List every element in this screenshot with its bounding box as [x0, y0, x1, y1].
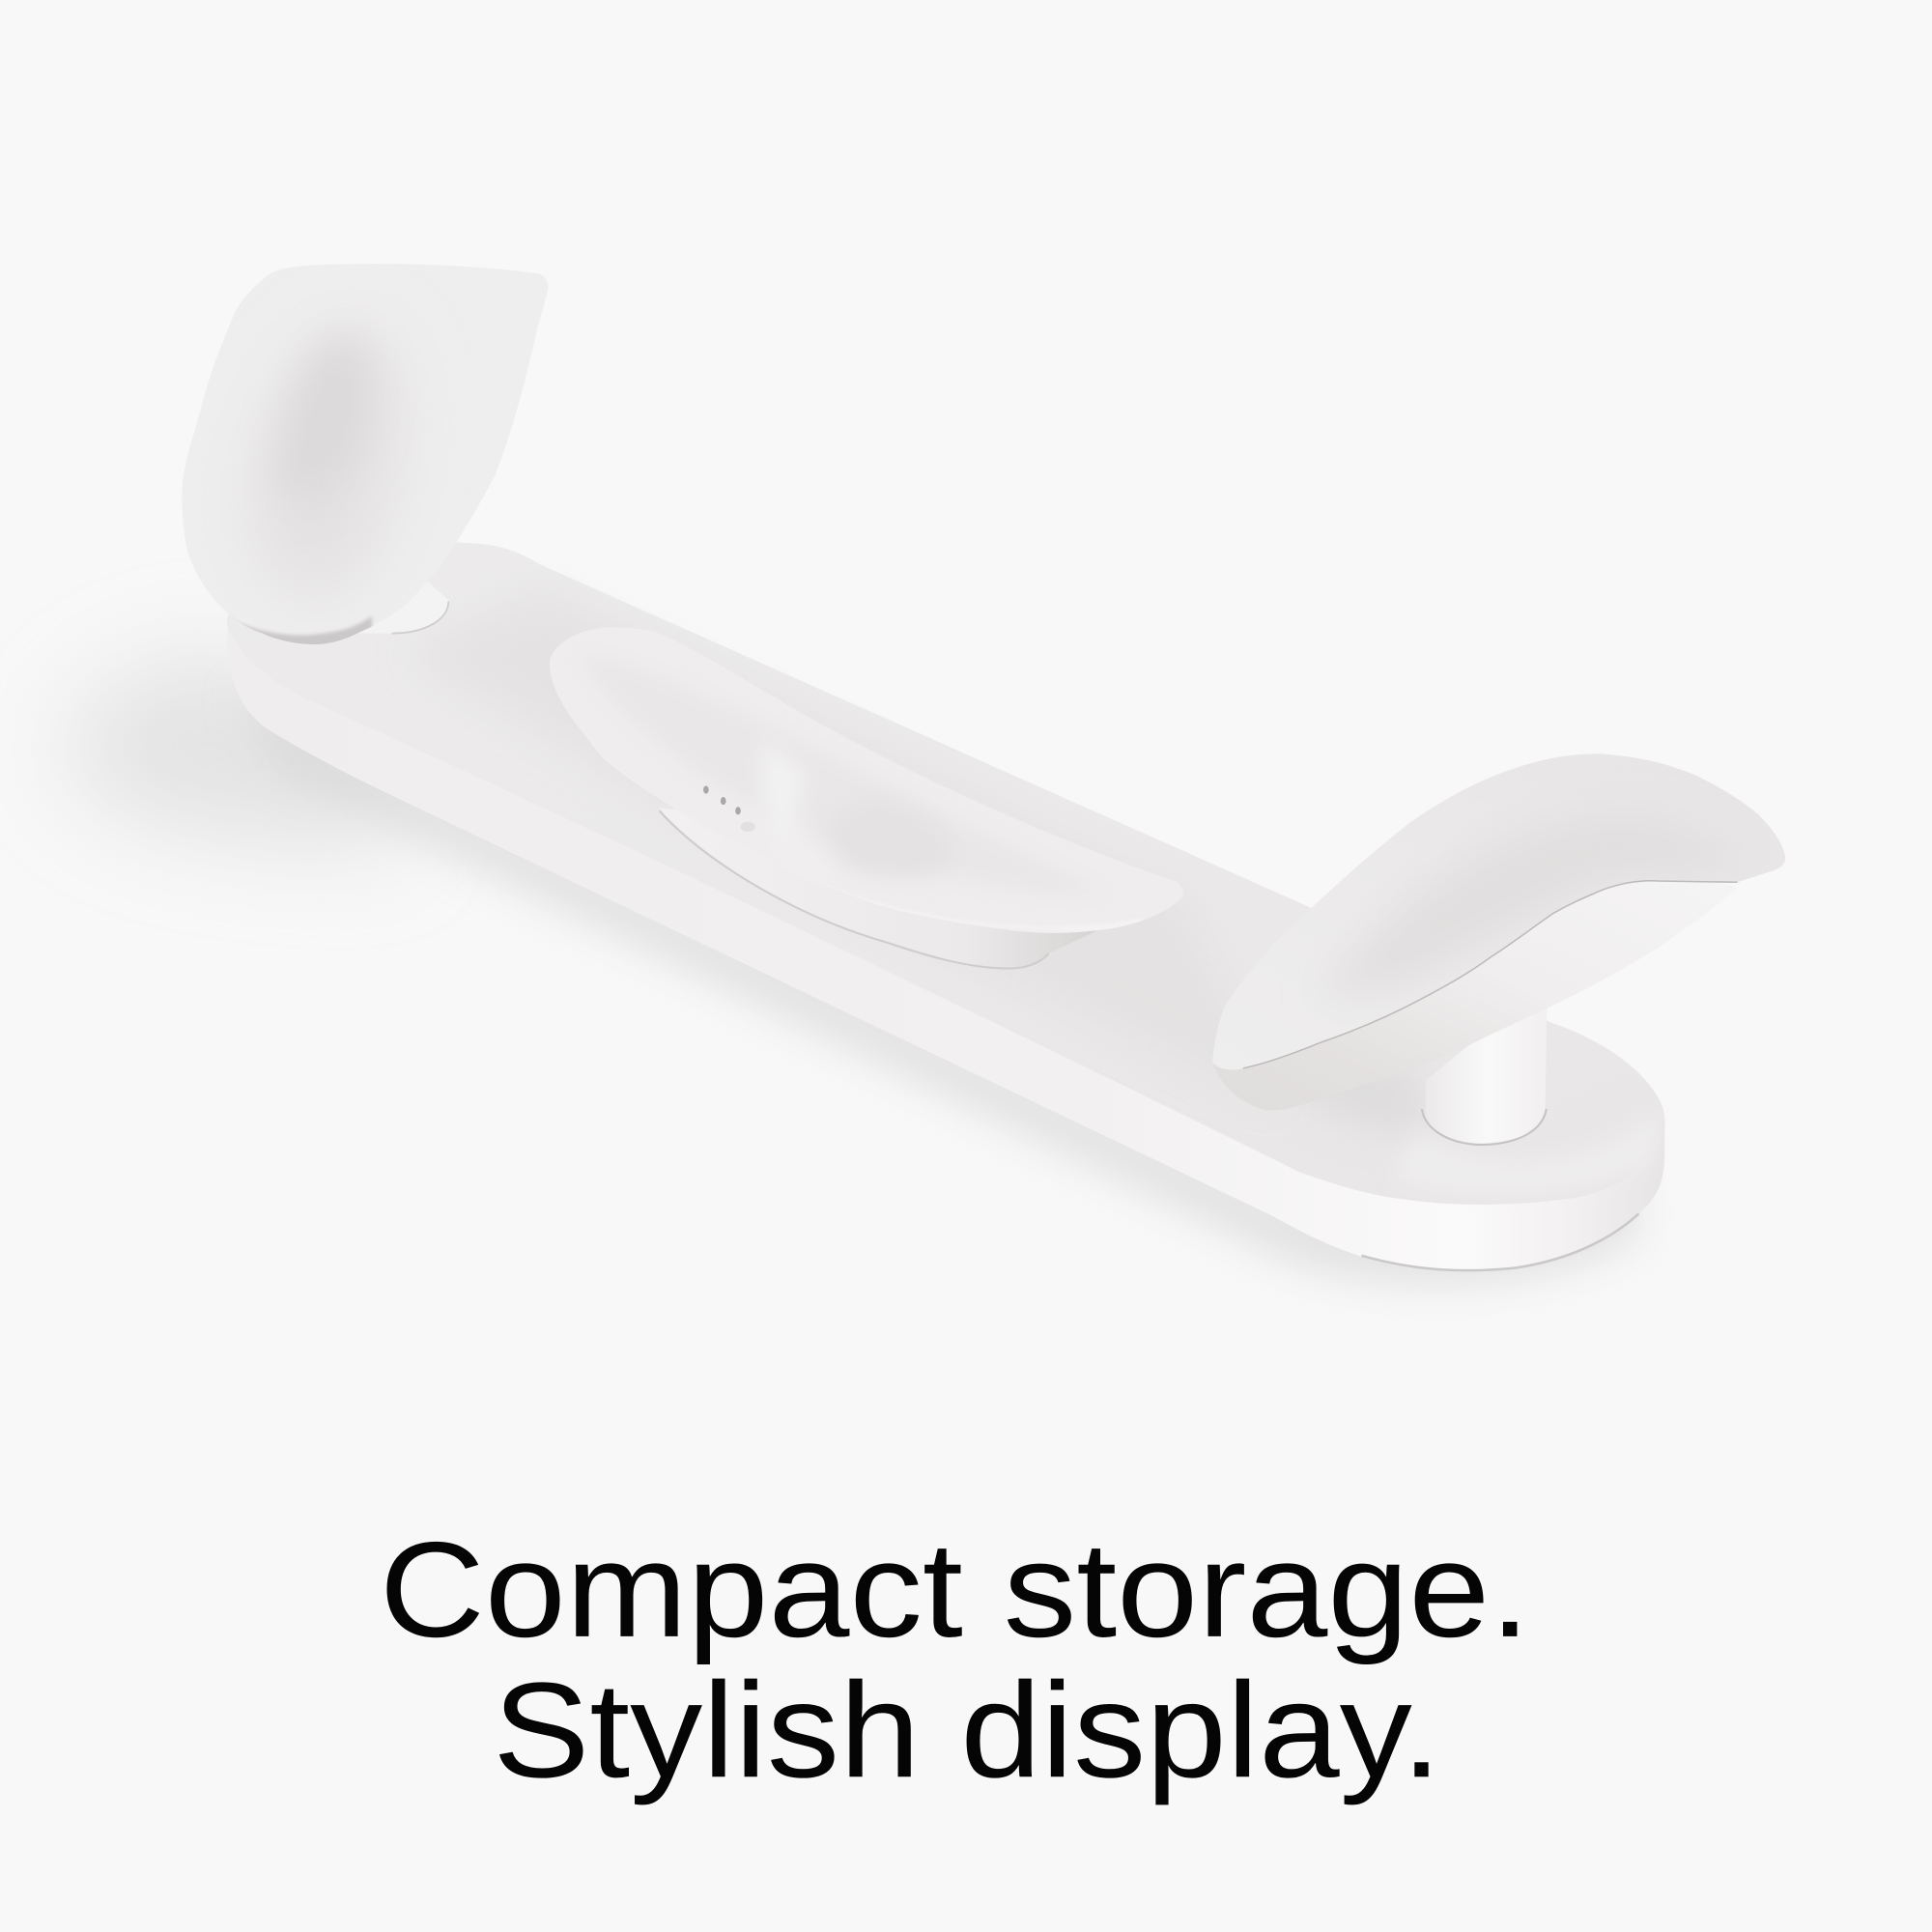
- drop shadow under product: [62, 653, 1638, 1285]
- middle charging dish: [550, 627, 1183, 969]
- right cup underside: [1212, 863, 1737, 1110]
- right cup rim line: [1243, 881, 1737, 1068]
- right stand: [1212, 753, 1785, 1145]
- left stem: [357, 579, 448, 634]
- headline line 1: Compact storage.: [380, 1514, 1530, 1665]
- base plate bottom edge shadow line: [1361, 1213, 1638, 1270]
- charging pin dots: [703, 786, 755, 832]
- base plate side wall: [227, 579, 1664, 1270]
- base plate soft surface shading: [407, 591, 1282, 1109]
- charging base plate: [227, 543, 1665, 1270]
- base plate top surface: [227, 543, 1665, 1205]
- headline text: [380, 1514, 1530, 1805]
- left stem ring: [392, 601, 448, 634]
- right stem: [1422, 974, 1548, 1145]
- middle dish: [550, 627, 1183, 933]
- left stand: [182, 264, 549, 653]
- headline line 2: Stylish display.: [493, 1654, 1441, 1805]
- small oval hollow: [760, 739, 958, 890]
- left cup: [182, 264, 549, 653]
- infographic canvas: [73, 265, 1785, 1804]
- right cup bowl: [1212, 753, 1785, 1069]
- middle dish underside disc: [659, 809, 1097, 969]
